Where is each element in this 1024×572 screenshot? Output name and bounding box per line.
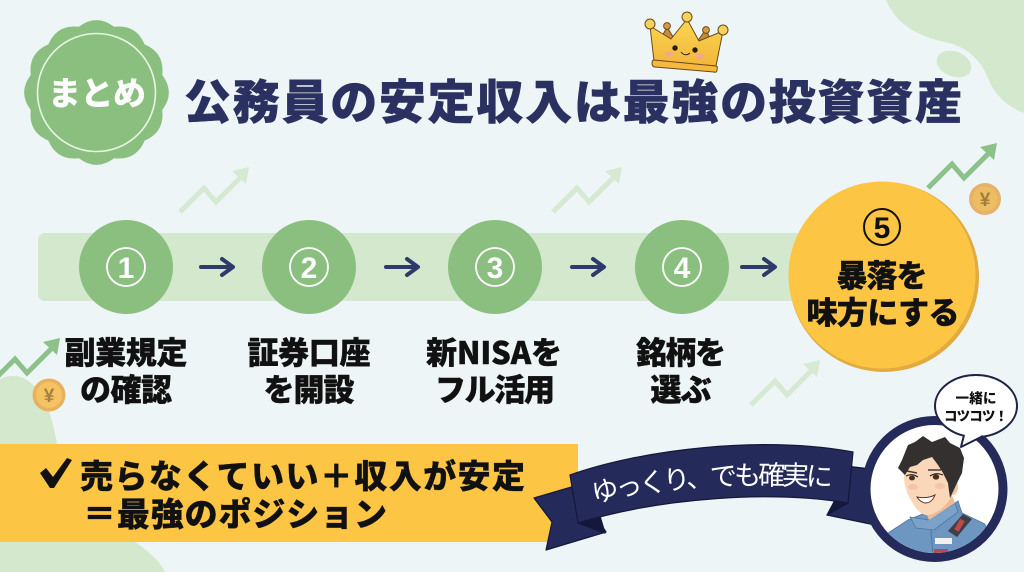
character portrait <box>866 420 1003 558</box>
conclusion text: ＝最強のポジション <box>83 496 387 533</box>
ribbon banner <box>533 444 871 551</box>
step 5 circle: 味方にする <box>806 296 960 331</box>
arrow 2 <box>386 259 418 275</box>
step 2 label <box>248 336 370 408</box>
decorative blob: bottom left <box>0 376 165 572</box>
step 2 label: 証券口座 <box>248 336 370 371</box>
arrow 1 <box>201 259 233 275</box>
neck and face <box>927 494 955 520</box>
trend arrow: faint lower right <box>751 360 820 405</box>
icon: yen coin left: ¥ <box>44 386 55 407</box>
step 5 circle: 5 <box>874 212 890 245</box>
icon: yen coin right <box>969 183 1001 215</box>
step 4 label <box>636 336 726 408</box>
step 5 circle <box>788 182 979 372</box>
step 3 label: 新NISAを <box>426 328 562 373</box>
arrow 4 <box>742 259 775 275</box>
step 4 circle: 4 <box>674 252 691 285</box>
process band <box>38 233 818 301</box>
trend arrow: green left <box>0 338 60 383</box>
step 1 label: 副業規定 <box>64 336 188 371</box>
eyes and mouth <box>909 476 915 480</box>
ribbon text: ゆっくり、でも確実に <box>594 462 830 502</box>
uniform <box>888 500 986 553</box>
speech bubble: コツコツ！ <box>944 409 1008 424</box>
icon: yen coin left <box>32 378 66 412</box>
step 2 circle <box>262 220 356 314</box>
step 1 circle: 1 <box>118 252 134 285</box>
conclusion text: 売らなくていい＋収入が安定 <box>80 458 525 495</box>
step 3 label <box>426 328 562 408</box>
step 4 label: 選ぶ <box>650 373 712 408</box>
decorative blob: top right <box>886 0 1024 113</box>
trend arrow: green upper right <box>928 143 997 188</box>
step 2 circle: 2 <box>301 252 317 285</box>
step 5 circle: 暴落を <box>836 259 928 294</box>
hair <box>898 436 964 498</box>
step 3 label: フル活用 <box>435 373 555 408</box>
step 4 circle <box>635 220 729 314</box>
step 4 label: 銘柄を <box>636 336 726 371</box>
step 3 circle <box>448 220 542 314</box>
badge: まとめ: まとめ <box>48 75 146 112</box>
step 3 circle: 3 <box>487 252 503 285</box>
title: 公務員の安定収入は最強の投資資産 <box>184 76 962 129</box>
trend arrow: faint upper left <box>180 167 249 212</box>
conclusion band <box>0 444 578 542</box>
speech bubble: 一緒に <box>956 390 996 406</box>
trend arrow: faint center <box>553 167 622 212</box>
step 1 label <box>64 336 188 408</box>
step 1 label: の確認 <box>80 373 172 408</box>
arrow 3 <box>572 259 604 275</box>
conclusion text <box>80 458 525 533</box>
step 2 label: を開設 <box>264 373 354 408</box>
icon: yen coin right: ¥ <box>980 190 991 211</box>
badge: まとめ <box>24 20 169 165</box>
icon: crown <box>645 12 728 72</box>
speech bubble <box>935 375 1017 447</box>
step 1 circle <box>79 220 173 314</box>
check mark <box>40 458 72 488</box>
